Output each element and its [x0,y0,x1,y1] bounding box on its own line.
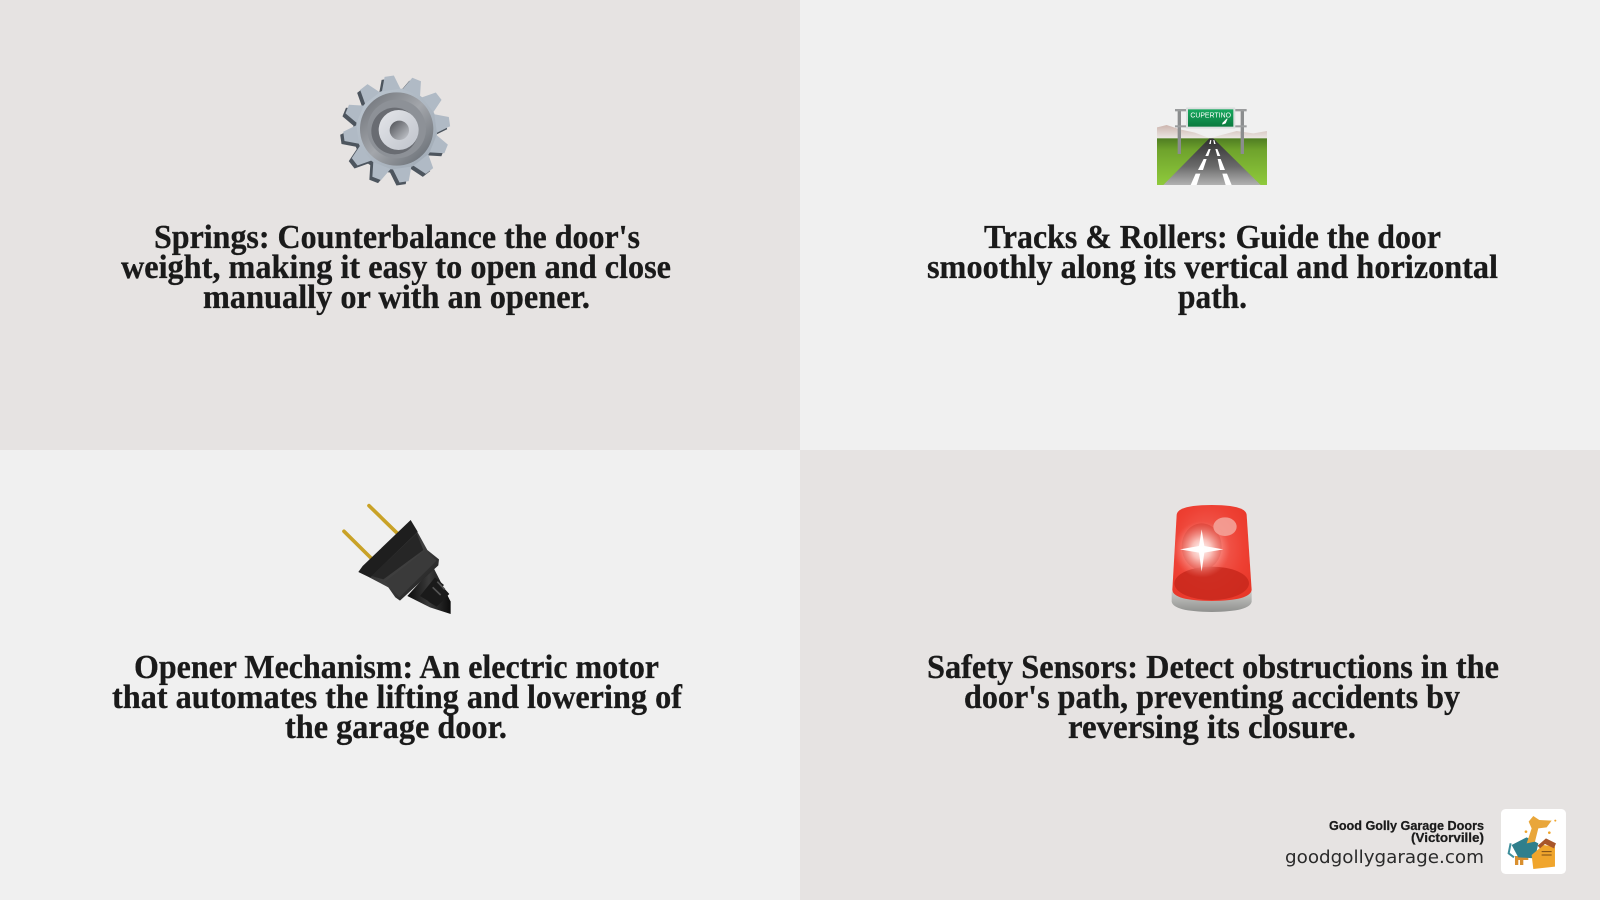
panel: tracks and rollers background [800,0,1600,450]
text: springs description: Springs: Counterbalance the door's [154,219,640,256]
icon: highway with green sign [1157,107,1267,185]
text: tracks and rollers description: Tracks & Rollers: Guide the door [984,219,1441,256]
text: tracks and rollers description: path. [1178,279,1247,316]
panel: opener mechanism background [0,450,800,900]
panel: springs background [0,0,800,450]
footer: company name and website [1285,819,1484,868]
text: safety sensors description: door's path, preventing accidents by [964,679,1460,716]
icon: gear [340,75,451,186]
text: opener mechanism description: that automates the lifting and lowering of [112,679,683,716]
panel: safety sensors background [800,450,1600,900]
text: safety sensors description [927,649,1499,746]
footer: company name and website: goodgollygarage.com [1285,847,1484,868]
icon: red flashing beacon [1172,505,1252,612]
text: safety sensors description: reversing its closure. [1068,709,1356,746]
footer: company name and website: (Victorville) [1411,831,1484,845]
text: opener mechanism description: the garage door. [285,709,507,746]
text: tracks and rollers description [927,219,1498,316]
text: springs description: weight, making it easy to open and close [121,249,671,286]
text: opener mechanism description: Opener Mechanism: An electric motor [134,649,659,686]
icon: electric plug [344,506,451,614]
text: springs description [121,219,671,316]
text: opener mechanism description [112,649,683,746]
logo: giraffe with garage [1501,809,1566,874]
text: safety sensors description: Safety Sensors: Detect obstructions in the [927,649,1499,686]
footer: company name and website: Good Golly Garage Doors [1329,819,1484,833]
text: tracks and rollers description: smoothly along its vertical and horizontal [927,249,1498,286]
icon: highway with green sign: CUPERTINO [1190,112,1232,119]
text: springs description: manually or with an opener. [203,279,590,316]
